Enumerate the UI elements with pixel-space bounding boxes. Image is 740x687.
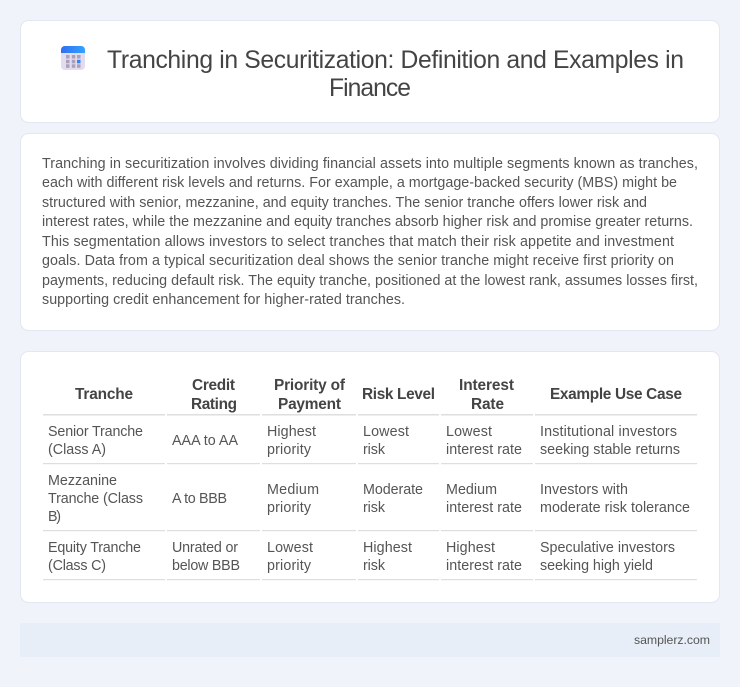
table row: mezzanine tranche: A to BBB bbox=[172, 491, 227, 507]
table row: senior tranche: (Class A) bbox=[48, 442, 106, 458]
title bbox=[107, 47, 684, 102]
table row: mezzanine tranche: priority bbox=[267, 500, 312, 516]
table row: senior tranche bbox=[48, 424, 680, 458]
title: Finance bbox=[329, 75, 411, 102]
table row: mezzanine tranche: Mezzanine bbox=[48, 473, 117, 489]
table row: senior tranche: AAA to AA bbox=[172, 433, 238, 449]
table header: Example Use Case bbox=[550, 386, 682, 403]
icon: calendar bbox=[61, 46, 85, 70]
text block: description paragraph: supporting credit enhancement for higher-rated tranches. bbox=[42, 292, 405, 308]
text block: description paragraph: goals. Data from a typical securitization deal shows the senior tranche might receive first priority on bbox=[42, 253, 674, 269]
table row: equity tranche: Equity Tranche bbox=[48, 540, 141, 556]
table row: senior tranche: priority bbox=[267, 442, 312, 458]
table row: equity tranche: Highest bbox=[446, 540, 495, 556]
text block: description paragraph: Tranching in securitization involves dividing financial assets into multiple segments known as tranches, bbox=[42, 156, 698, 172]
table row: mezzanine tranche bbox=[48, 473, 690, 525]
table row: senior tranche: Lowest bbox=[446, 424, 492, 440]
table row: senior tranche: seeking stable returns bbox=[540, 442, 680, 458]
table row: mezzanine tranche: Medium bbox=[446, 482, 497, 498]
table header: Interest bbox=[459, 377, 514, 394]
table row: equity tranche bbox=[48, 540, 675, 574]
table header: Tranche bbox=[75, 386, 133, 403]
table row: equity tranche: Speculative investors bbox=[540, 540, 675, 556]
table row: equity tranche: priority bbox=[267, 558, 312, 574]
text block: description paragraph: This segmentation allows investors to select tranches that match their risk appetite and investment bbox=[42, 234, 674, 250]
table row: senior tranche: Institutional investors bbox=[540, 424, 677, 440]
table row: mezzanine tranche: risk bbox=[363, 500, 386, 516]
table row: senior tranche: Highest bbox=[267, 424, 316, 440]
table header: Priority of bbox=[274, 377, 346, 394]
table row: senior tranche: Lowest bbox=[363, 424, 409, 440]
panel: title card bbox=[20, 20, 720, 122]
table row: mezzanine tranche: B) bbox=[48, 509, 61, 525]
table row: mezzanine tranche: Medium bbox=[267, 482, 319, 498]
table row: equity tranche: seeking high yield bbox=[540, 558, 653, 574]
title: Tranching in Securitization: Definition and Examples in bbox=[107, 47, 684, 74]
text block: description paragraph: payments, reducing default risk. The equity tranche, positioned at the lowest rank, assumes losses first, bbox=[42, 273, 698, 289]
table row: mezzanine tranche: interest rate bbox=[446, 500, 522, 516]
table row: senior tranche: Senior Tranche bbox=[48, 424, 143, 440]
table row: mezzanine tranche: moderate risk tolerance bbox=[540, 500, 690, 516]
text block: description paragraph: each with different risk levels and returns. For example, a mortgage-backed security (MBS) might be bbox=[42, 175, 677, 191]
table header: Risk Level bbox=[362, 386, 435, 403]
table header: Rating bbox=[191, 396, 237, 413]
table row: equity tranche: (Class C) bbox=[48, 558, 106, 574]
table header: Payment bbox=[278, 396, 341, 413]
table row: equity tranche: Unrated or bbox=[172, 540, 238, 556]
table row: equity tranche: Highest bbox=[363, 540, 412, 556]
footer text: samplerz.com bbox=[634, 633, 710, 647]
table row: equity tranche: interest rate bbox=[446, 558, 522, 574]
table header: Rate bbox=[471, 396, 504, 413]
panel: tranche table bbox=[20, 352, 720, 602]
table row: senior tranche: interest rate bbox=[446, 442, 522, 458]
table header: Credit bbox=[192, 377, 235, 394]
table row: equity tranche: risk bbox=[363, 558, 386, 574]
text block: description paragraph: structured with senior, mezzanine, and equity tranches. The senior tranche offers lower risk and bbox=[42, 195, 647, 211]
table header bbox=[75, 377, 682, 413]
table row: mezzanine tranche: Tranche (Class bbox=[48, 491, 143, 507]
table row: mezzanine tranche: Moderate bbox=[363, 482, 423, 498]
table row: equity tranche: Lowest bbox=[267, 540, 313, 556]
text block: description paragraph: interest rates, while the mezzanine and equity tranches absorb higher risk and promise greater returns. bbox=[42, 214, 693, 230]
table row: senior tranche: risk bbox=[363, 442, 386, 458]
text block: description paragraph bbox=[42, 156, 698, 308]
footer bar bbox=[20, 623, 720, 657]
table row: equity tranche: below BBB bbox=[172, 558, 240, 574]
panel: description bbox=[20, 134, 720, 330]
table row: mezzanine tranche: Investors with bbox=[540, 482, 628, 498]
